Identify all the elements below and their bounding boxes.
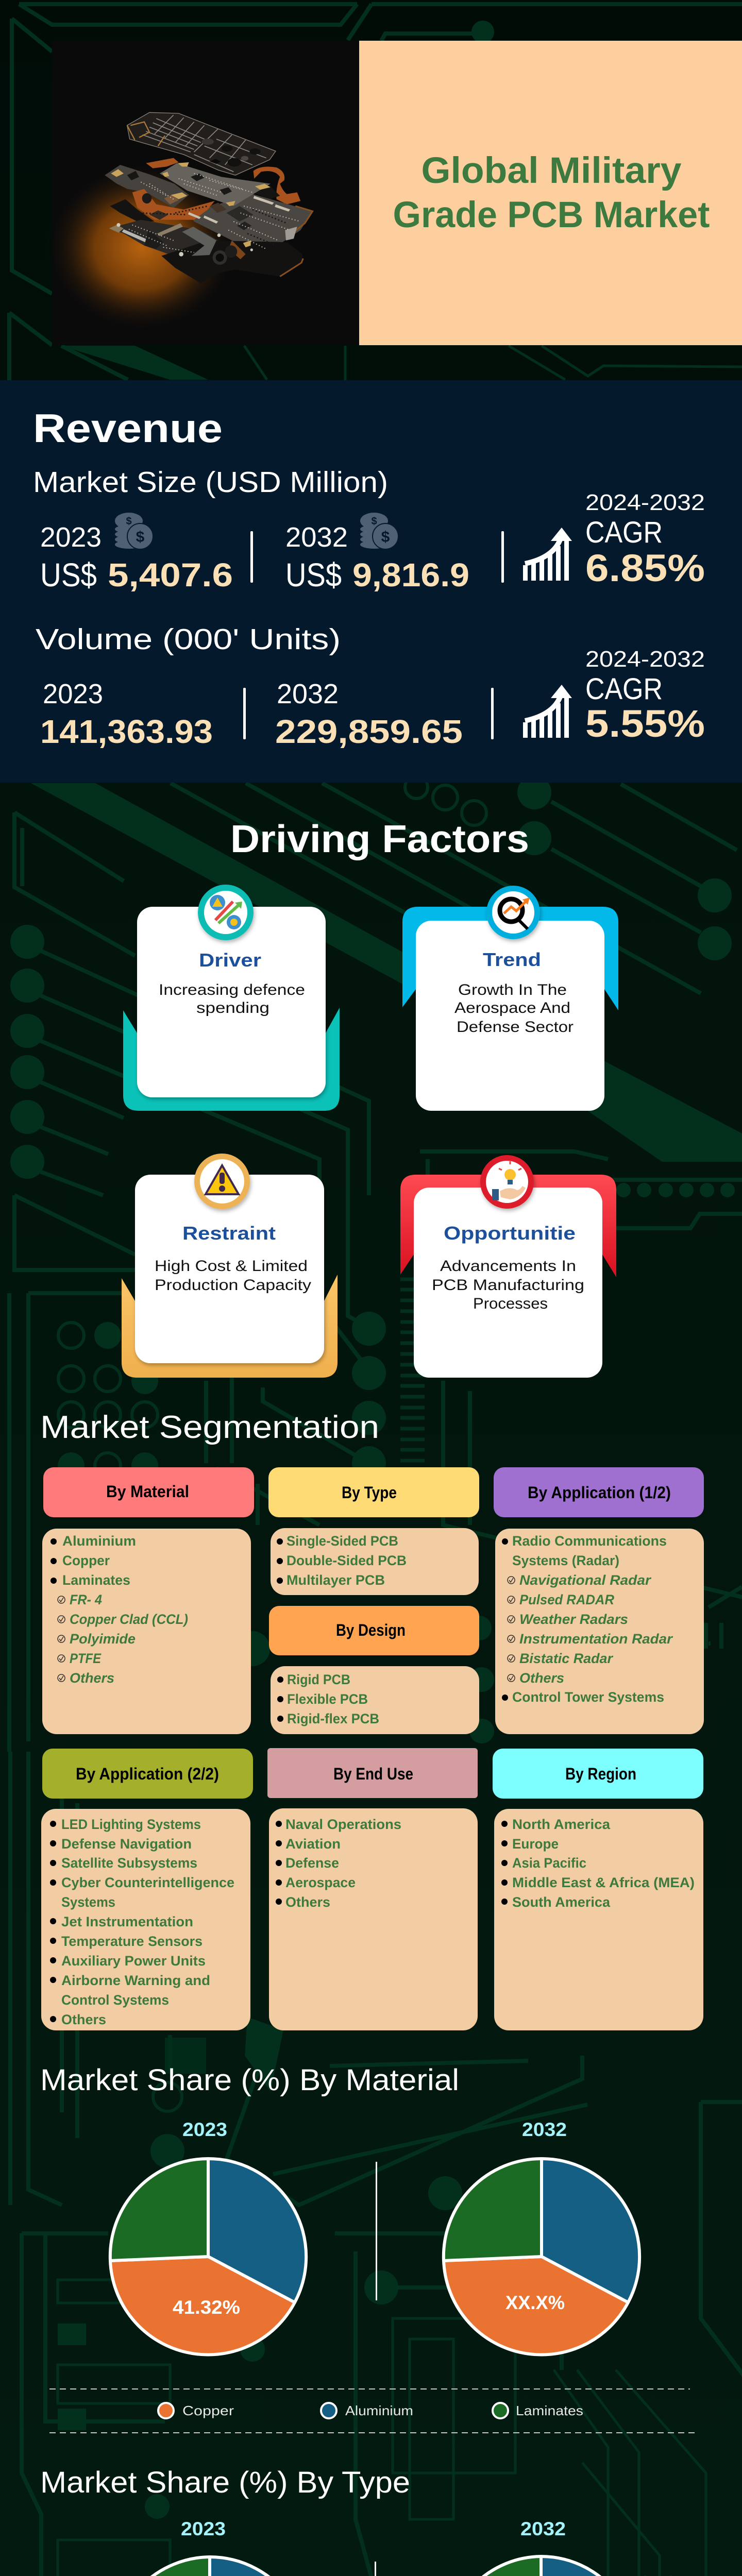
list: application 2: Defense Navigation [61,1836,192,1852]
year label 2023: 2023 [181,2518,226,2539]
list: application 2: Satellite Subsystems [61,1855,197,1871]
card text: spending [196,999,269,1016]
list: end use: Naval Operations [285,1817,401,1832]
stat: market size 2032: US$ [285,556,342,594]
list: application 1: Others [519,1670,564,1686]
list: material: FR- 4 [70,1592,102,1607]
list: design [271,1666,479,1734]
stat: revenue CAGR: CAGR [585,516,663,549]
panel: by region: By Region [565,1765,636,1783]
card text [159,981,305,1016]
stat: volume CAGR: CAGR [585,672,663,706]
panel: by material [42,1467,254,1734]
list: application 2 [41,1809,250,2030]
heading: revenue: Revenue [33,405,223,451]
icon: growth arrow 2 [523,685,572,738]
icon: restraint [194,1154,250,1209]
card text: Advancements In [440,1258,576,1275]
heading: driving factors: Driving Factors [230,817,529,860]
icon: driver [198,885,254,940]
stat: volume CAGR: 5.55% [585,702,705,745]
card text: Increasing defence [159,981,305,998]
panel: by end use [267,1748,478,2030]
panel: by design: By Design [336,1621,406,1639]
card title: Driver [199,950,261,971]
list: application 1: Pulsed RADAR [519,1592,614,1607]
list: end use: Aviation [285,1836,341,1852]
stat: revenue CAGR: 2024-2032 [585,490,705,515]
legend: material: Laminates [516,2403,583,2418]
list: end use: Others [285,1894,330,1910]
card text: Production Capacity [155,1277,311,1294]
icon: trend [486,886,540,939]
pie chart: material 2023 [110,2159,306,2355]
list: material: Polyimide [70,1631,136,1647]
stat: market size 2032 [285,522,469,594]
year label 2032: 2032 [522,2119,567,2140]
stat: market size 2032: 9,816.9 [352,556,469,594]
list: material: Laminates [62,1572,130,1588]
list: region: North America [512,1817,611,1832]
stat: volume 2023: 141,363.93 [40,713,213,750]
card text [454,981,574,1036]
panel: by type: By Type [342,1483,397,1502]
icon: coins 2032 [360,513,398,549]
list: application 1: Systems (Radar) [512,1553,619,1568]
card text: PCB Manufacturing [432,1277,584,1294]
panel: by application 1: By Application (1/2) [528,1483,671,1502]
list: material: Others [70,1670,114,1686]
title panel [359,41,742,345]
card title: Trend [483,949,541,970]
pie chart: type 2023 [113,2557,308,2576]
list: application 2: Others [61,2012,106,2027]
panel: by application 1 [494,1467,704,1734]
list: application 2: LED Lighting Systems [61,1817,201,1832]
hero image panel: exploded PCB assembly [46,41,359,345]
card text: Growth In The [458,981,567,998]
icon: coins 2032: $ [381,529,390,546]
list: application 1: Control Tower Systems [512,1689,664,1705]
list: application 2: Cyber Counterintelligence [61,1875,234,1890]
list: region [494,1809,703,2030]
list: type: Multilayer PCB [286,1572,385,1588]
list: application 1: Radio Communications [512,1533,667,1549]
list: application 2: Auxiliary Power Units [61,1953,206,1969]
list: region: Europe [512,1836,559,1852]
panel: by type [268,1467,479,1595]
panel: by material: By Material [106,1482,189,1501]
list: application 1: Navigational Radar [519,1572,652,1588]
stat: volume 2023: 2023 [43,679,103,709]
legend: material: Copper [182,2403,234,2418]
list: application 2: Systems [61,1894,115,1910]
pie chart: material 2023: 41.32% [173,2297,240,2318]
stat: revenue CAGR: 6.85% [585,547,705,589]
list: material: Aluminium [62,1533,136,1549]
stat: volume 2032: 2032 [277,679,339,709]
stat: revenue CAGR [585,490,705,589]
icon: opportunity [480,1155,534,1209]
list: material: Copper Clad (CCL) [70,1612,188,1627]
list: material [42,1529,251,1734]
panel: by design [269,1606,479,1734]
market size subheading: Market Size (USD Million) [33,466,388,499]
list: application 1: Weather Radars [519,1612,628,1627]
pie chart: material 2032: XX.X% [505,2292,565,2313]
panel: by application 2: By Application (2/2) [76,1765,219,1783]
title panel: Grade PCB Market [393,195,710,235]
list: design: Rigid PCB [287,1672,350,1687]
list: region: Middle East & Africa (MEA) [512,1875,695,1890]
year label 2023: 2023 [182,2119,227,2140]
card text: Defense Sector [457,1019,574,1036]
title: Global Military [421,150,682,191]
heading: market share by type: Market Share (%) By Type [40,2466,410,2499]
card text: Aerospace And [454,999,570,1016]
card text [155,1258,311,1294]
icon: coins 2023: $ [136,529,145,546]
stat: market size 2023 [40,522,233,594]
card title: Opportunitie [444,1223,576,1244]
card text: High Cost & Limited [155,1258,308,1275]
list: application 2: Control Systems [61,1992,169,2008]
stat: market size 2023: US$ [40,556,97,594]
panel: restraint card [122,1154,338,1378]
list: material: Copper [62,1553,110,1568]
list: region: South America [512,1894,611,1910]
card title: Restraint [182,1223,276,1244]
list: end use [269,1808,478,2030]
stat: volume CAGR: 2024-2032 [585,647,705,672]
legend: material: Aluminium [345,2403,413,2418]
list: application 1: Bistatic Radar [519,1651,613,1666]
list: application 2: Jet Instrumentation [61,1914,193,1929]
card text: Processes [473,1295,548,1312]
icon: coins 2023 [115,513,153,549]
stat: market size 2032: 2032 [285,522,348,553]
list: region: Asia Pacific [512,1855,586,1871]
list: application 1: Instrumentation Radar [519,1631,673,1647]
icon: growth arrow 1 [523,528,572,581]
list: material: PTFE [70,1651,102,1666]
stat: market size 2023: 5,407.6 [108,556,233,594]
list: end use: Aerospace [285,1875,356,1890]
heading: market share by material: Market Share (%) By Material [40,2063,459,2097]
pie chart: type 2032 [446,2556,637,2576]
list: application 2: Airborne Warning and [61,1973,210,1988]
list: application 1 [495,1529,704,1734]
panel: by end use: By End Use [333,1765,413,1783]
stat: volume 2032 [275,679,463,750]
list: type [271,1528,479,1595]
list: type: Single-Sided PCB [286,1533,398,1549]
panel: revenue [0,380,742,783]
stat: volume 2032: 229,859.65 [275,713,463,750]
pie chart: material 2032 [444,2159,639,2355]
list: design: Flexible PCB [287,1691,368,1707]
panel: opportunity card [400,1155,616,1378]
panel: trend card [402,886,618,1111]
year label 2032: 2032 [520,2518,566,2539]
list: design: Rigid-flex PCB [287,1711,379,1726]
heading: market segmentation: Market Segmentation [40,1410,379,1445]
panel: by application 2 [41,1749,253,2030]
list: end use: Defense [285,1855,339,1871]
panel: by region [493,1749,703,2030]
list: type: Double-Sided PCB [286,1553,407,1568]
list: application 2: Temperature Sensors [61,1934,203,1949]
stat: market size 2023: 2023 [40,522,102,553]
icon: coins 2032: $ [371,516,377,527]
volume subheading: Volume (000' Units) [36,623,341,656]
legend: material [158,2403,583,2418]
stat: volume 2023 [40,679,213,750]
card text [432,1258,584,1312]
panel: driver card [123,885,340,1111]
icon: coins 2023: $ [126,516,132,527]
stat: volume CAGR [585,647,705,745]
